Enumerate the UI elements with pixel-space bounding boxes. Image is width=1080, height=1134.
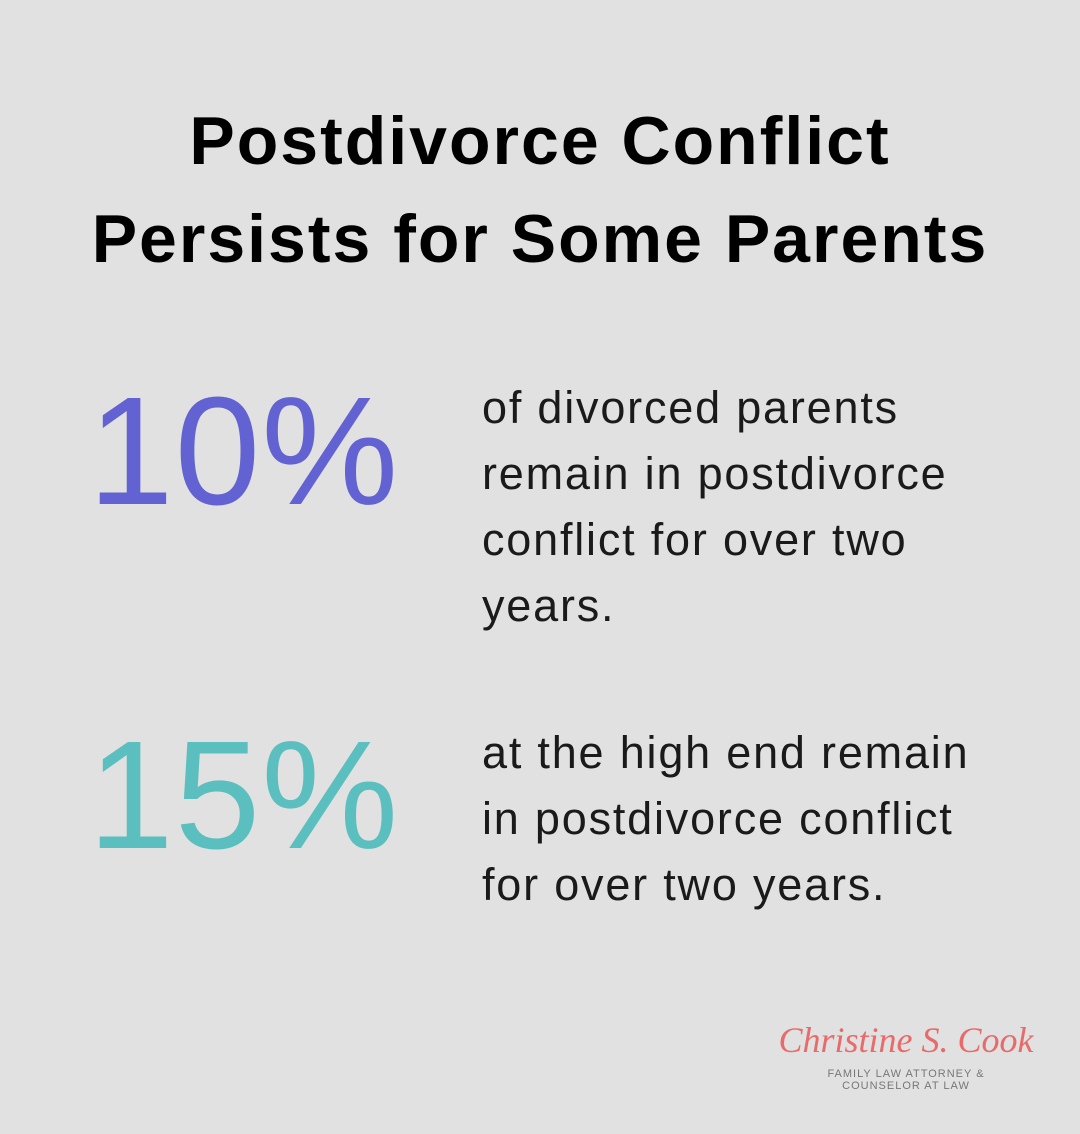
stat: 15%: 15% [88,709,399,881]
stat: 10%: 10% [88,365,399,537]
text: 10% description [482,382,948,631]
text: 15% description: for over two years. [482,859,886,910]
text: 15% description [482,727,969,910]
text: 10% description: remain in postdivorce [482,448,948,499]
logo: COUNSELOR AT LAW [842,1080,970,1092]
title [92,103,988,277]
text: 10% description: conflict for over two [482,514,907,565]
logo: FAMILY LAW ATTORNEY & [827,1068,985,1080]
title: Persists for Some Parents [92,201,988,277]
text: 15% description: at the high end remain [482,727,969,778]
title: Postdivorce Conflict [189,103,891,179]
logo [778,1020,1034,1092]
text: 15% description: in postdivorce conflict [482,793,954,844]
text: 10% description: years. [482,580,615,631]
logo: Christine S. Cook [778,1020,1034,1060]
text: 10% description: of divorced parents [482,382,899,433]
